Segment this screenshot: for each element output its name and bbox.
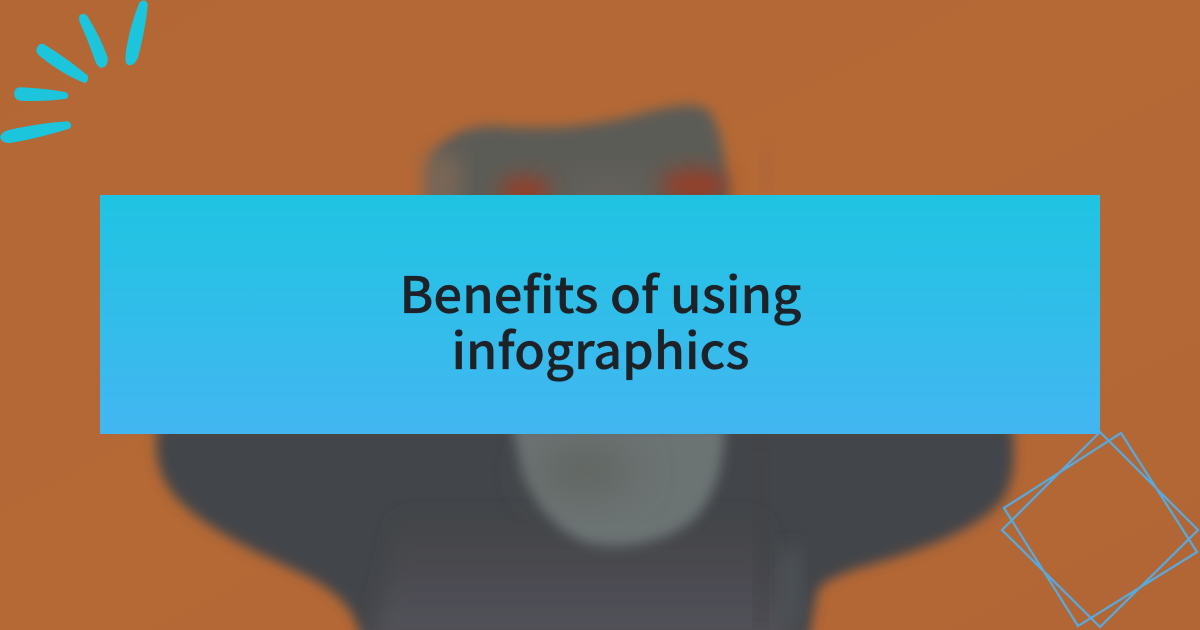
blurred strap [762,150,771,190]
blurred hat [432,105,730,210]
title text: Benefits of using [400,256,802,328]
blurred lower garment [372,520,790,630]
blurred hat left fade [425,155,460,210]
blurred hat centre [560,182,660,218]
blurred red glasses [499,168,729,208]
blurred hooded body [156,425,1014,630]
title panel [100,195,1100,434]
icon: overlapping outlined diamonds [1002,432,1198,627]
title text: infographics [452,312,750,384]
blurred dark fold [756,440,766,630]
blurred blue-grey fold [782,550,800,628]
icon: cyan spark strokes [1,1,147,142]
blurred shirt centre [512,425,725,546]
blurred shirt shadow [535,446,635,494]
